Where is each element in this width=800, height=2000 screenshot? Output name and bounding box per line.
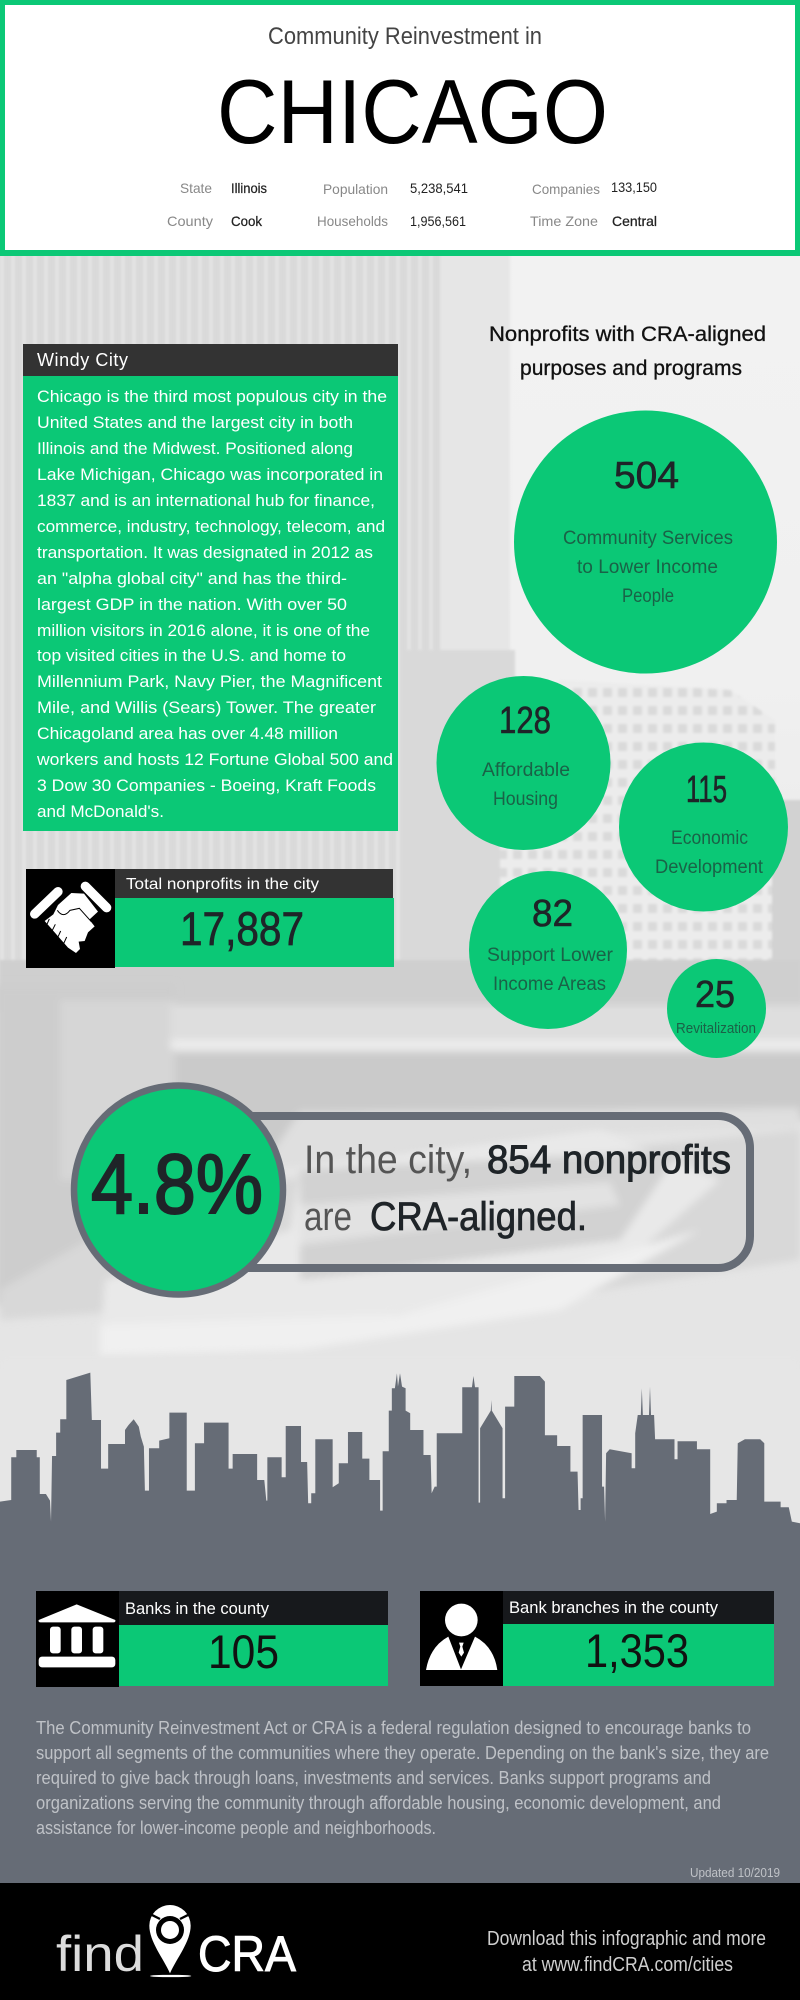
title: CHICAGO <box>217 62 608 163</box>
callout: CRA-aligned share <box>74 1086 750 1294</box>
stat card: bank branches <box>420 1591 774 1686</box>
heading: nonprofits with CRA-aligned purposes: Nonprofits with CRA-aligned <box>489 323 766 346</box>
callout: CRA-aligned share: CRA-aligned. <box>370 1195 587 1239</box>
bubble: community services <box>514 410 777 674</box>
city description: top visited cities in the U.S. and home to <box>37 647 346 665</box>
bubble: affordable housing: 128 <box>499 700 551 742</box>
bubble: support lower income areas <box>469 871 627 1029</box>
city facts: Households <box>317 213 388 229</box>
stat label: Total nonprofits in the city <box>126 876 319 893</box>
bubble: revitalization: Revitalization <box>676 1021 756 1037</box>
city facts: Cook <box>231 213 263 229</box>
icon: map pin <box>149 1905 191 1977</box>
header panel <box>0 0 800 256</box>
logo: findCRA: find <box>56 1926 144 1982</box>
city description: an "alpha global city" and has the third- <box>37 570 347 588</box>
skyline silhouette <box>0 1373 800 1884</box>
bubble: economic development: Development <box>655 857 764 878</box>
city facts: 5,238,541 <box>410 180 468 196</box>
callout text: In the city, <box>304 1138 472 1182</box>
city facts: Time Zone <box>530 213 598 229</box>
city facts: County <box>167 213 213 229</box>
bubble: support lower income areas: 82 <box>532 893 573 935</box>
stat label: Bank branches in the county <box>509 1598 718 1617</box>
stat card: banks <box>36 1591 388 1687</box>
CRA explanation text: organizations serving the community through affordable housing, economic development, and <box>36 1793 721 1813</box>
city facts: Population <box>323 181 388 197</box>
city description <box>36 388 393 821</box>
city description: million visitors in 2016 alone, it is one of the <box>37 622 370 640</box>
subtitle: Community Reinvestment in <box>268 23 542 50</box>
city facts: Illinois <box>231 180 267 196</box>
download call to action: at www.findCRA.com/cities <box>522 1954 733 1976</box>
city description: transportation. It was designated in 2012 as <box>37 544 373 562</box>
footer <box>0 1883 800 2000</box>
bubble: economic development: 115 <box>686 769 727 811</box>
stat value: 1,353 <box>585 1624 689 1677</box>
city facts: Central <box>612 213 657 229</box>
bubble: revitalization <box>667 959 766 1058</box>
bubble: support lower income areas: Income Areas <box>493 974 606 995</box>
bubble: economic development <box>619 742 788 912</box>
icon: bank building <box>39 1604 115 1667</box>
bubble: revitalization: 25 <box>695 974 735 1016</box>
background photo: Chicago river and buildings <box>0 250 800 1560</box>
icon: businessperson <box>426 1604 497 1670</box>
CRA explanation text: The Community Reinvestment Act or CRA is a federal regulation designed to encourage banks to <box>36 1718 751 1738</box>
CRA explanation text: assistance for lower-income people and neighborhoods. <box>36 1818 436 1838</box>
CRA explanation text: required to give back through loans, investments and services. Banks support programs and <box>36 1768 711 1788</box>
percentage: 4.8% <box>91 1137 263 1231</box>
heading: nonprofits with CRA-aligned purposes: purposes and programs <box>520 357 742 380</box>
city description: Mile, and Willis (Sears) Tower. The greater <box>37 699 377 717</box>
city description: Illinois and the Midwest. Positioned along <box>37 440 353 458</box>
city description: 1837 and is an international hub for finance, <box>37 492 375 510</box>
bubble: economic development: Economic <box>671 828 748 849</box>
icon: handshake <box>35 886 107 953</box>
city facts: Companies <box>532 181 600 197</box>
stat value: 17,887 <box>180 902 304 955</box>
bubble: community services: Community Services <box>563 528 733 549</box>
bubble: support lower income areas: Support Lower <box>487 945 614 966</box>
city description: largest GDP in the nation. With over 50 <box>37 596 347 614</box>
city description: and McDonald's. <box>37 803 164 821</box>
city facts: 133,150 <box>611 179 657 195</box>
city description: Lake Michigan, Chicago was incorporated in <box>37 466 383 484</box>
city description: Chicago is the third most populous city in the <box>37 388 387 406</box>
bubble: community services: People <box>622 586 674 607</box>
callout: CRA-aligned share: 854 nonprofits <box>487 1138 731 1182</box>
city facts: State <box>180 180 212 196</box>
updated date: Updated 10/2019 <box>690 1865 780 1880</box>
city description: 3 Dow 30 Companies - Boeing, Kraft Foods <box>37 777 376 795</box>
city description: United States and the largest city in both <box>37 414 353 432</box>
city facts <box>167 179 657 229</box>
stat label: Banks in the county <box>125 1599 269 1618</box>
download call to action <box>487 1928 766 1976</box>
logo: findCRA: CRA <box>198 1926 297 1982</box>
city description: workers and hosts 12 Fortune Global 500 and <box>36 751 393 769</box>
city description: Chicagoland area has over 4.48 million <box>37 725 338 743</box>
heading: nonprofits with CRA-aligned purposes <box>489 323 766 380</box>
panel: Windy City <box>23 344 398 831</box>
bubble: affordable housing <box>436 676 610 850</box>
panel heading: Windy City <box>37 350 128 370</box>
stat card: total nonprofits <box>26 869 394 968</box>
logo: findCRA <box>56 1905 297 1982</box>
bubble: community services: 504 <box>614 455 679 497</box>
bubble: community services: to Lower Income <box>577 557 718 578</box>
stat value: 105 <box>208 1625 279 1678</box>
callout: CRA-aligned share: are <box>304 1195 352 1239</box>
city facts: 1,956,561 <box>410 213 466 229</box>
CRA explanation text <box>36 1718 769 1838</box>
bubble: affordable housing: Housing <box>493 789 558 810</box>
city description: commerce, industry, technology, telecom, and <box>37 518 385 536</box>
city description: Millennium Park, Navy Pier, the Magnificent <box>37 673 382 691</box>
download call to action: Download this infographic and more <box>487 1928 766 1950</box>
bubble: affordable housing: Affordable <box>482 760 570 781</box>
